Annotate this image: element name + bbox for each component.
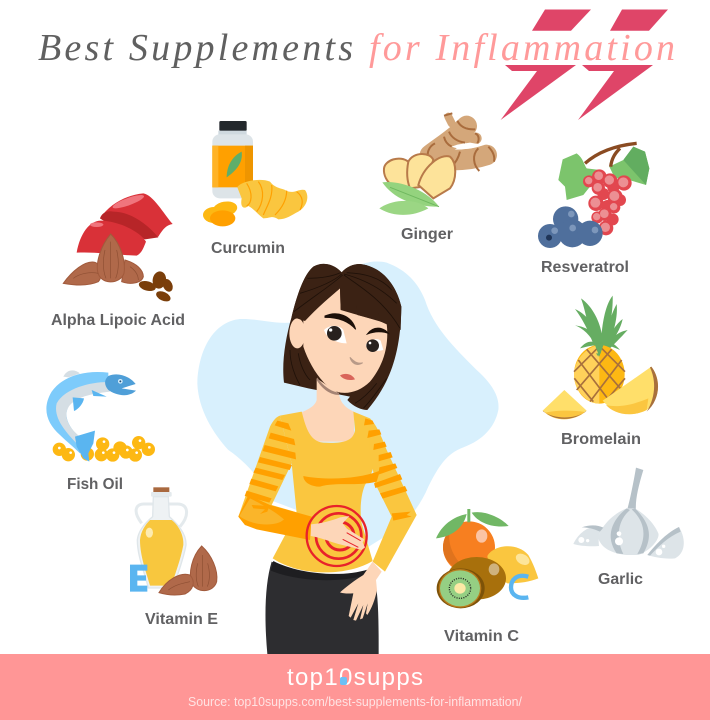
neck and chest: [302, 378, 354, 442]
almonds: [122, 260, 143, 283]
hair back: [283, 264, 401, 410]
item: curcumin: [203, 121, 307, 226]
bulb: [598, 508, 659, 555]
stem: [627, 468, 643, 512]
label: Vitamin C: Vitamin C: [444, 628, 519, 645]
eyebrows: [325, 314, 356, 329]
hand on hip: [340, 562, 382, 621]
title: for Inflammation: [369, 27, 675, 69]
hair front: [292, 264, 401, 330]
pineapple leaves: [575, 296, 628, 357]
orange: [443, 521, 495, 573]
right clove: [647, 527, 684, 559]
item: vitamin E: [130, 487, 217, 595]
nose: [350, 357, 363, 364]
fish tail: [75, 431, 95, 462]
label: Bromelain: Bromelain: [561, 431, 641, 448]
left sleeve: [238, 416, 312, 540]
neck shadow: [317, 377, 339, 395]
icon: lightning decoration: [501, 10, 668, 120]
item: alpha lipoic acid: [63, 193, 175, 303]
label: Garlic: Garlic: [598, 571, 643, 588]
skirt: [265, 562, 379, 654]
turmeric slices: [212, 200, 238, 218]
title: Best Supplements: [38, 27, 353, 69]
label: Alpha Lipoic Acid: Alpha Lipoic Acid: [51, 312, 185, 329]
pineapple wedge right: [603, 367, 658, 414]
title: [38, 27, 675, 69]
pineapple wedge left: [543, 390, 587, 419]
label: Curcumin: Curcumin: [211, 240, 285, 257]
label: Resveratrol: Resveratrol: [541, 259, 629, 276]
leaves: [436, 514, 467, 538]
leaves: [558, 153, 600, 200]
left clove: [573, 526, 603, 546]
fish head: [105, 374, 136, 395]
bottle: [219, 121, 247, 131]
item: garlic: [573, 468, 684, 559]
almonds: [190, 546, 217, 591]
left eye: [324, 326, 347, 343]
oil bottle: [136, 504, 187, 527]
stomach pain rings: [307, 506, 367, 566]
item: resveratrol: [538, 143, 649, 248]
oil capsules: [53, 436, 155, 462]
sleeve stripes: [245, 418, 412, 521]
ginger slices: [384, 154, 455, 198]
waistband: [271, 561, 368, 580]
item: bromelain: [543, 296, 658, 419]
leaves: [382, 182, 439, 207]
item: fish oil: [46, 370, 155, 462]
right sleeve: [370, 418, 417, 572]
label: Vitamin E: Vitamin E: [145, 611, 218, 628]
label: Ginger: Ginger: [401, 226, 453, 243]
flax seeds: [138, 270, 175, 303]
stem: [585, 143, 637, 167]
hand on stomach: [311, 516, 365, 550]
forearm: [238, 495, 312, 540]
item: vitamin C: [436, 509, 538, 608]
red meat: [100, 193, 173, 238]
torso: [273, 412, 376, 572]
letter C: [511, 576, 528, 598]
letter E: [130, 565, 147, 592]
leaf: [227, 152, 242, 177]
hair strands: [290, 273, 400, 408]
logo: top10supps: [287, 664, 423, 691]
ear: [289, 318, 305, 348]
source text: Source: top10supps.com/best-supplements-for-inflammation/: [188, 695, 523, 709]
right eye: [366, 339, 383, 352]
fins: [73, 397, 84, 411]
mouth: [340, 374, 355, 380]
woman figure: [238, 264, 417, 654]
turmeric root: [237, 180, 307, 219]
face: [303, 288, 387, 393]
pineapple body: [574, 345, 625, 404]
item: ginger: [379, 113, 494, 215]
kiwi: [447, 557, 506, 600]
blueberries: [538, 206, 603, 248]
label: Fish Oil: Fish Oil: [67, 476, 123, 493]
ginger root: [430, 117, 487, 160]
icon: capsule: [340, 677, 347, 685]
background blob: [197, 261, 499, 550]
fish body: [46, 372, 108, 453]
lemon: [487, 546, 538, 583]
footer band: [0, 654, 710, 720]
grapes: [583, 169, 632, 235]
